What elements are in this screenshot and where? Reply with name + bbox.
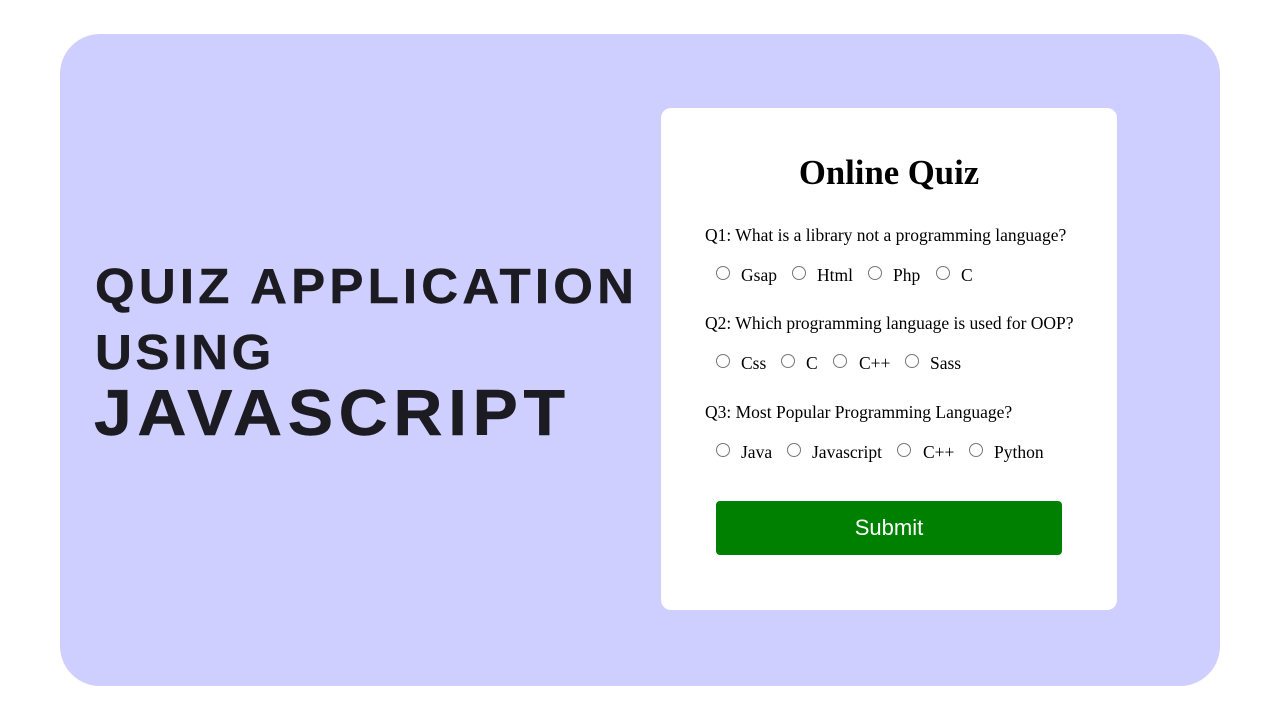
submit button [716,501,1062,555]
question 2 options: Css [741,353,766,373]
question 3 options [716,442,1044,462]
title line 3: JAVASCRIPT [94,377,571,450]
question 2 options: Sass [930,353,961,373]
question 1 options: Html [817,265,853,285]
question 3 options: Java [741,442,772,462]
title line 2: USING [95,324,275,379]
question 2 options [716,353,961,373]
question 2: Q2: Which programming language is used for OOP? [705,313,1074,333]
question 2 options: C [806,353,818,373]
question 1 options: C [961,265,973,285]
title [94,258,638,450]
quiz heading: Online Quiz [799,153,979,192]
title line 1: QUIZ APPLICATION [95,258,638,313]
question 3: Q3: Most Popular Programming Language? [705,402,1012,422]
question 1: Q1: What is a library not a programming language? [705,225,1066,245]
question 1 options [716,265,973,285]
submit button: Submit [855,515,923,540]
question 3 options: C++ [923,442,954,462]
question 3 options: Python [994,442,1044,462]
question 2 options: C++ [859,353,890,373]
question 1 options: Php [893,265,920,285]
panel: quiz card [661,108,1117,610]
question 3 options: Javascript [812,442,882,462]
question 1 options: Gsap [741,265,777,285]
